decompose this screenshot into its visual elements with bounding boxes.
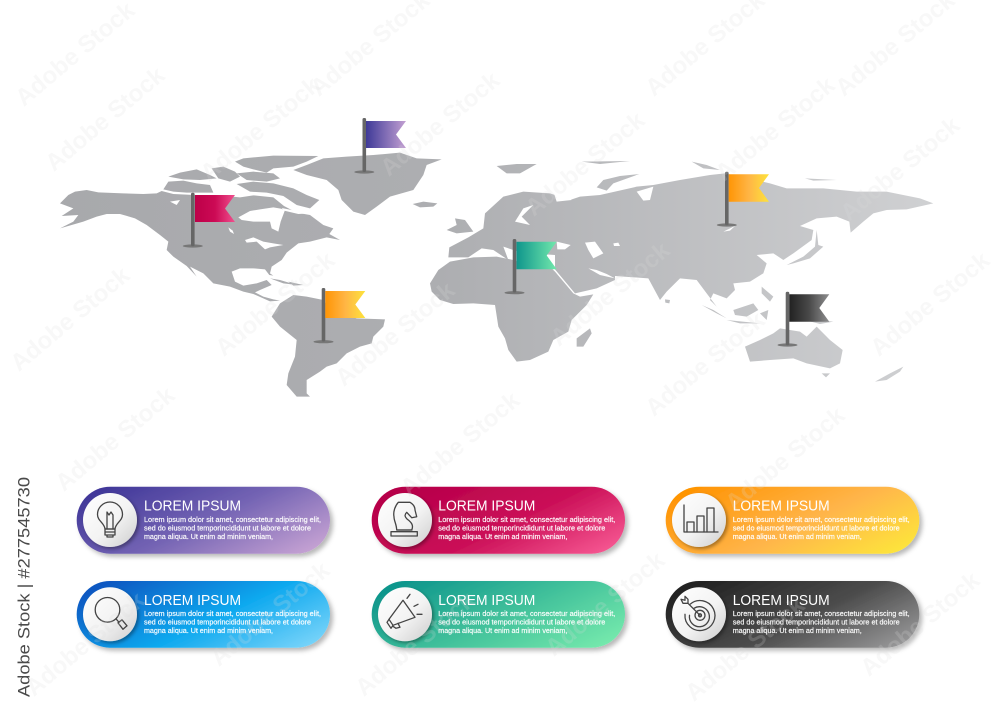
panel: blue magnifier — [77, 581, 330, 648]
text block: sed do eiusmod temporincididunt ut labore et dolore — [144, 523, 311, 532]
landmass: South America — [272, 295, 385, 397]
watermark: repeated diagonal text: Adobe Stock — [375, 66, 506, 182]
watermark: repeated diagonal text: Adobe Stock — [20, 586, 151, 702]
landmass: Africa — [430, 257, 593, 362]
heading: LOREM IPSUM — [438, 592, 535, 609]
watermark: repeated diagonal text: Adobe Stock — [540, 546, 671, 662]
watermark: repeated diagonal text: Adobe Stock — [395, 386, 526, 502]
watermark: repeated diagonal text: Adobe Stock — [210, 246, 341, 362]
watermark: repeated diagonal text: Adobe Stock — [720, 401, 851, 517]
watermark: repeated diagonal text: Adobe Stock — [855, 566, 986, 682]
text block: Lorem ipsum dolor sit amet, consectetur adipiscing elit, — [733, 609, 910, 618]
water: inland seas — [515, 187, 735, 278]
text block: sed do eiusmod temporincididunt ut labore et dolore — [733, 618, 900, 626]
icon: bar chart — [684, 505, 718, 532]
text block: magna aliqua. Ut enim ad minim veniam, — [144, 626, 273, 635]
watermark: repeated diagonal text: Adobe Stock — [710, 71, 841, 187]
world map — [60, 153, 933, 397]
watermark: repeated diagonal text: Adobe Stock — [330, 276, 461, 392]
watermark: repeated diagonal text: Adobe Stock — [40, 61, 171, 177]
icon: light bulb — [98, 502, 122, 537]
text block: magna aliqua. Ut enim ad minim veniam, — [144, 532, 273, 541]
text block: Lorem ipsum dolor sit amet, consectetur adipiscing elit, — [438, 515, 615, 524]
landmass: Iceland — [413, 202, 437, 207]
text block: magna aliqua. Ut enim ad minim veniam, — [733, 532, 862, 541]
heading: LOREM IPSUM — [144, 592, 241, 609]
text block: magna aliqua. Ut enim ad minim veniam, — [438, 626, 567, 635]
watermark: repeated diagonal text: Adobe Stock — [545, 236, 676, 352]
landmass: Arctic islands — [497, 161, 837, 191]
landmass: Australia — [745, 327, 843, 368]
panel: red chess knight — [372, 487, 625, 554]
heading: LOREM IPSUM — [438, 498, 535, 515]
watermark: repeated diagonal text: Adobe Stock — [350, 586, 481, 702]
flag: purple on Greenland — [354, 118, 406, 174]
panel: orange bar chart — [666, 487, 919, 554]
text block: sed do eiusmod temporincididunt ut labore et dolore — [438, 523, 605, 532]
watermark: repeated diagonal text: Adobe Stock — [10, 0, 141, 112]
heading: LOREM IPSUM — [733, 592, 830, 609]
landmass: Arctic islands — [163, 156, 319, 208]
landmass: North America — [60, 190, 340, 301]
text block: sed do eiusmod temporincididunt ut labore et dolore — [438, 618, 605, 626]
icon: target with arrow — [681, 596, 715, 631]
landmass: British Isles — [447, 218, 473, 233]
heading: LOREM IPSUM — [144, 498, 241, 515]
watermark: stock id: Adobe Stock | #277545730 — [16, 477, 34, 697]
panel: green megaphone — [372, 581, 625, 648]
landmass: Madagascar — [577, 328, 592, 347]
flag: green on North Africa — [504, 239, 557, 294]
flag: orange on Russia — [717, 172, 769, 227]
watermark: repeated diagonal text: Adobe Stock — [640, 306, 771, 422]
text block: Lorem ipsum dolor sit amet, consectetur adipiscing elit, — [438, 609, 615, 618]
map: Eurasia, Africa, Oceania — [430, 161, 933, 382]
icon: chess knight — [391, 502, 417, 536]
panel: purple lightbulb — [77, 487, 330, 554]
text block: sed do eiusmod temporincididunt ut labore et dolore — [144, 618, 311, 626]
watermark: repeated diagonal text: Adobe Stock — [865, 246, 996, 362]
watermark: repeated diagonal text: Adobe Stock — [835, 111, 966, 227]
landmass: Japan and Sakhalin — [787, 230, 823, 265]
landmass: Eurasia — [448, 173, 933, 317]
icon: magnifier — [95, 598, 127, 629]
landmass: Caribbean islands — [270, 278, 303, 286]
heading: LOREM IPSUM — [733, 498, 830, 515]
watermark: repeated diagonal text: Adobe Stock — [5, 261, 136, 377]
landmass: Tasmania and New Zealand — [822, 367, 903, 382]
icon: megaphone — [387, 594, 422, 628]
text block: magna aliqua. Ut enim ad minim veniam, — [733, 626, 862, 635]
watermark: repeated diagonal text: Adobe Stock — [680, 591, 811, 707]
watermark: repeated diagonal text: Adobe Stock — [195, 71, 326, 187]
text block: magna aliqua. Ut enim ad minim veniam, — [438, 532, 567, 541]
flag: orange on South America — [314, 288, 365, 343]
watermark: repeated diagonal text: Adobe Stock — [205, 556, 336, 672]
panel: black target — [666, 581, 919, 648]
watermark: repeated diagonal text: Adobe Stock — [520, 106, 651, 222]
landmass: Greenland — [293, 153, 442, 215]
map: Americas and Greenland — [60, 153, 442, 397]
flag: black on Australia — [778, 292, 829, 347]
text block: Lorem ipsum dolor sit amet, consectetur adipiscing elit, — [733, 515, 910, 524]
text block: Lorem ipsum dolor sit amet, consectetur adipiscing elit, — [144, 515, 321, 524]
water: Hudson Bay and lakes — [170, 200, 309, 249]
text block: Lorem ipsum dolor sit amet, consectetur adipiscing elit, — [144, 609, 321, 618]
flag: red on North America — [183, 193, 235, 248]
landmass: Southeast Asia islands — [665, 287, 833, 324]
watermark: repeated diagonal text: Adobe Stock — [50, 381, 181, 497]
text block: sed do eiusmod temporincididunt ut labore et dolore — [733, 523, 900, 532]
